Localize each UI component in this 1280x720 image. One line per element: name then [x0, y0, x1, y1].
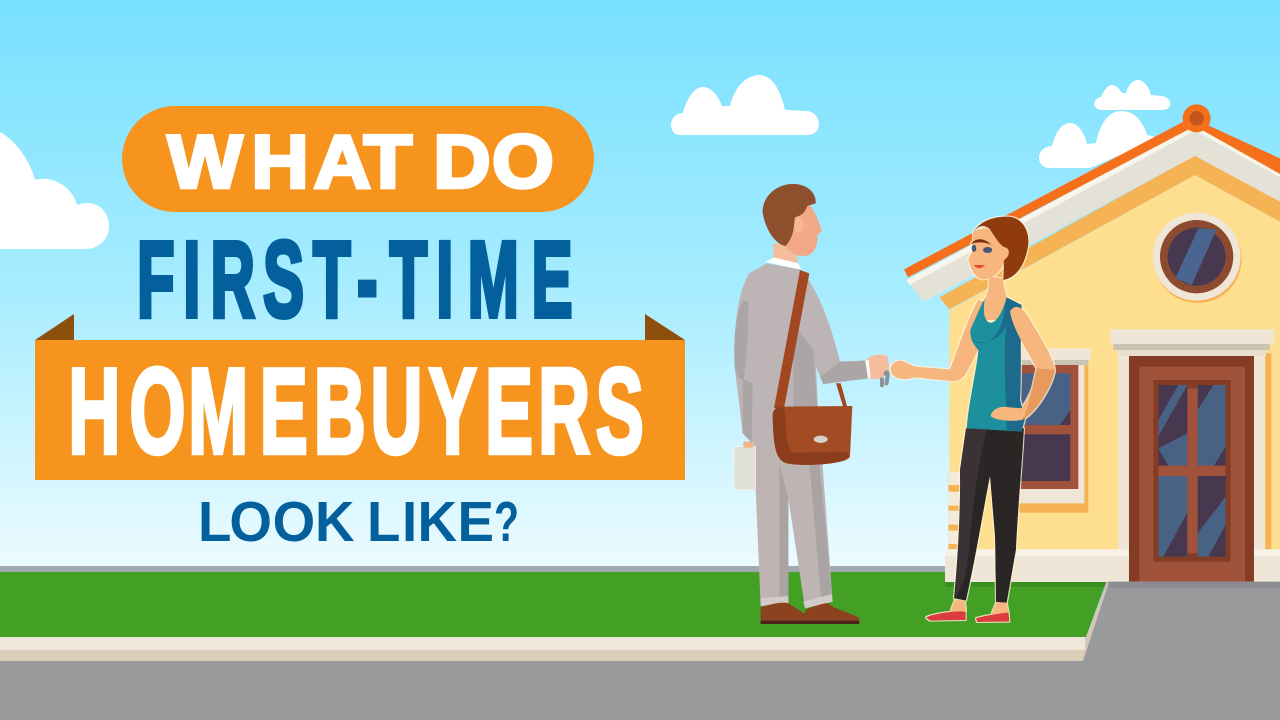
house: gable and roof	[904, 104, 1280, 581]
house: wall details, window and door	[945, 329, 1280, 588]
round window	[1153, 213, 1242, 303]
cloud: left	[0, 132, 109, 249]
man: neck	[773, 243, 797, 267]
road and driveway	[0, 582, 1280, 720]
woman: face details	[971, 239, 992, 268]
man: hand and keys	[866, 355, 889, 379]
title banner: homebuyers: HOMEBUYERS	[68, 343, 644, 480]
woman: front arm	[891, 300, 990, 381]
roof ornament	[1183, 104, 1211, 132]
window	[997, 348, 1091, 513]
man: collar	[765, 257, 801, 270]
woman: top	[967, 297, 1025, 432]
curb	[0, 582, 1109, 661]
title badge: what do	[122, 106, 594, 212]
woman: hair	[973, 217, 1029, 280]
woman: neck and chest	[983, 277, 1010, 320]
house	[904, 104, 1280, 588]
title badge: what do: WHAT DO	[167, 121, 554, 204]
woman: back arm and hand on hip	[991, 307, 1055, 421]
man: papers	[734, 447, 755, 490]
lawn	[0, 572, 1106, 637]
lawn shadow under plinth	[945, 582, 1106, 587]
base plinth	[945, 549, 1280, 582]
door shadow on drive	[1108, 582, 1280, 588]
woman: head	[968, 229, 1007, 279]
cloud: behind roof	[1039, 111, 1160, 168]
man	[734, 184, 890, 624]
title: look like: LOOK LIKE	[198, 489, 494, 553]
title: look like: ?	[494, 489, 519, 554]
cloud: top right small	[1094, 80, 1170, 110]
woman	[891, 217, 1055, 622]
cloud: top centre	[671, 75, 819, 135]
door surround	[1118, 353, 1265, 553]
sidewalk strip behind the lawn	[0, 566, 950, 573]
woman: feet and shoes	[950, 600, 1009, 614]
man: legs	[753, 430, 833, 608]
man: bag	[773, 270, 852, 465]
man: jacket	[734, 263, 869, 443]
man: shoes	[761, 603, 805, 624]
sky background	[0, 0, 1280, 568]
man: head	[783, 203, 822, 256]
title: first-time: FIRST-TIME	[137, 218, 573, 340]
wall siding stripes	[948, 472, 960, 550]
door	[1129, 356, 1254, 582]
woman: legs	[954, 428, 1024, 603]
